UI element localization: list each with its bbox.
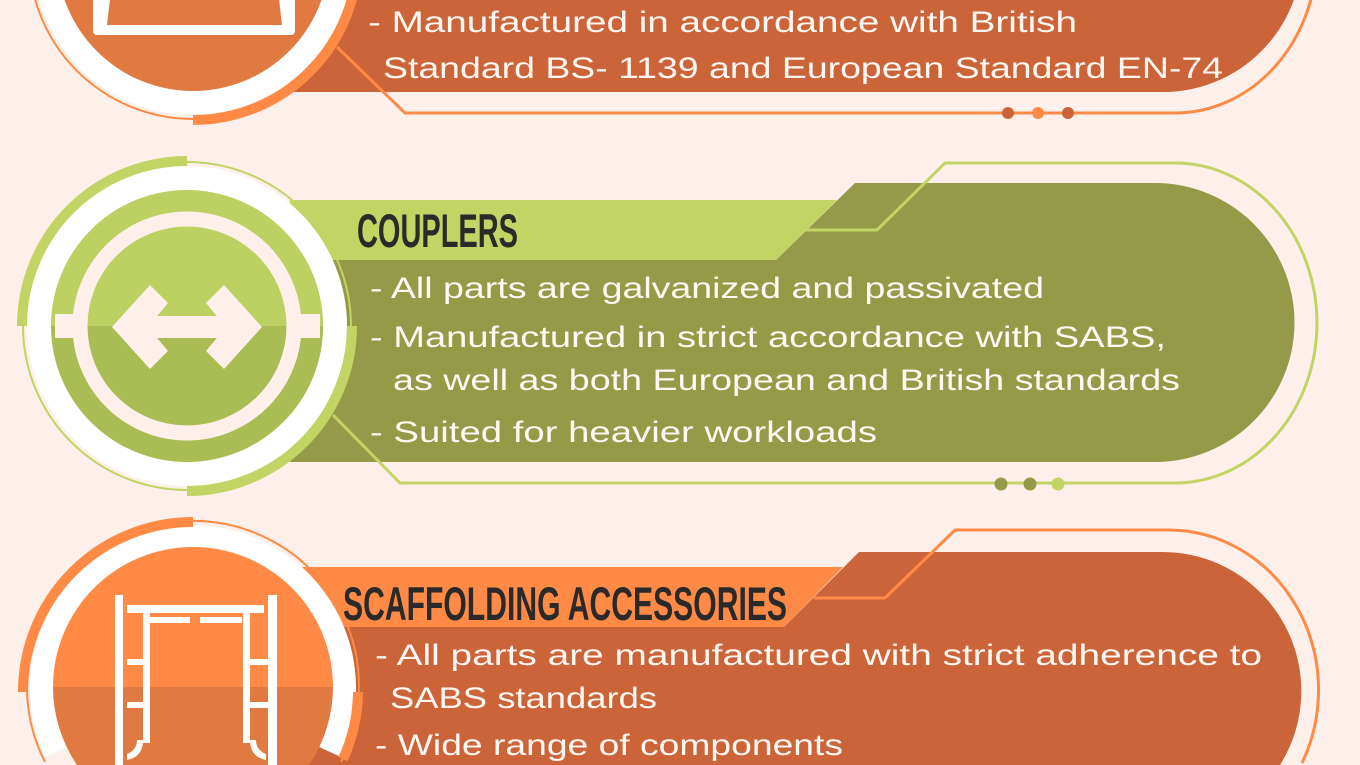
body text: - Suited for heavier workloads bbox=[370, 416, 877, 449]
header band bbox=[290, 567, 843, 627]
icon circle bbox=[23, 521, 359, 765]
body text: - All parts are manufactured with strict adherence to bbox=[375, 639, 1262, 672]
body text: as well as both European and British standards bbox=[393, 364, 1180, 397]
icon: scaffold frame bbox=[115, 595, 277, 765]
icon circle bbox=[29, 0, 358, 120]
panel: couplers bbox=[22, 161, 1317, 491]
panel: top product (orange) bbox=[29, 0, 1317, 120]
header band bbox=[290, 200, 837, 260]
banner outline bbox=[333, 163, 1317, 483]
body text bbox=[370, 272, 1180, 449]
title: COUPLERS bbox=[357, 204, 518, 257]
body text: Standard BS- 1139 and European Standard EN-74 bbox=[383, 52, 1223, 85]
banner body bbox=[290, 552, 1301, 765]
banner body bbox=[290, 183, 1294, 462]
body text: SABS standards bbox=[390, 682, 657, 715]
banner outline bbox=[814, 530, 1319, 763]
body text: - Wide range of components bbox=[375, 729, 843, 762]
body text: - Manufactured in strict accordance with SABS, bbox=[370, 321, 1166, 354]
panel: scaffolding accessories bbox=[23, 521, 1319, 765]
icon circle bbox=[22, 161, 352, 491]
body text bbox=[368, 6, 1223, 85]
dots bbox=[1002, 107, 1074, 119]
icon: double arrow bbox=[112, 285, 262, 369]
icon: frame bbox=[93, 0, 295, 35]
banner body bbox=[290, 0, 1302, 92]
dots bbox=[994, 478, 1064, 490]
body text: - Manufactured in accordance with British bbox=[368, 6, 1077, 39]
body text: - All parts are galvanized and passivated bbox=[370, 272, 1044, 305]
banner outline bbox=[337, 0, 1317, 113]
body text bbox=[375, 639, 1262, 762]
title: SCAFFOLDING ACCESSORIES bbox=[343, 577, 787, 630]
